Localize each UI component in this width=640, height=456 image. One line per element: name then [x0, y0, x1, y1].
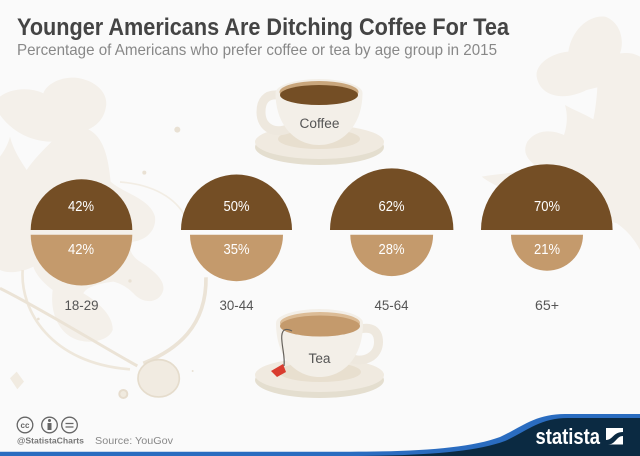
- title: Younger Americans Are Ditching Coffee For Tea: [17, 14, 510, 41]
- tea value: 28%: [378, 242, 405, 258]
- social handle: @StatistaCharts: [17, 436, 85, 446]
- coffee value: 70%: [534, 199, 560, 215]
- age label: 30-44: [220, 297, 254, 313]
- tea half circle 21%: [511, 235, 583, 271]
- tea surface: [280, 316, 360, 336]
- age label: 45-64: [374, 297, 409, 313]
- age group 65+: [481, 164, 613, 313]
- tea value: 35%: [224, 242, 250, 258]
- subtitle: Percentage of Americans who prefer coffee or tea by age group in 2015: [17, 42, 497, 59]
- statista wordmark: statista: [536, 424, 601, 449]
- age group 45-64: [330, 168, 453, 313]
- label: coffee: Coffee: [300, 116, 340, 131]
- age label: 65+: [535, 297, 559, 313]
- cup handle: [261, 95, 290, 131]
- coffee half circle 50%: [181, 174, 292, 230]
- coffee cup illustration: [255, 79, 384, 165]
- statista logo mark: [606, 428, 623, 444]
- source: Source: YouGov: [95, 435, 174, 447]
- tea cup illustration: [255, 309, 384, 398]
- coffee stains: left: [0, 78, 194, 399]
- tea cup body: [276, 323, 363, 377]
- coffee stains: right: [482, 17, 640, 250]
- coffee value: 50%: [224, 199, 250, 215]
- cup body: [276, 93, 362, 145]
- tea half circle 42%: [31, 235, 132, 285]
- age group 30-44: [181, 174, 292, 313]
- tea value: 42%: [68, 242, 94, 258]
- coffee half circle 70%: [481, 164, 613, 230]
- tea cup handle: [350, 328, 378, 360]
- tea bag tag: [271, 364, 286, 377]
- coffee half circle 42%: [31, 179, 132, 230]
- label: tea: Tea: [308, 351, 331, 366]
- saucer: [255, 125, 384, 165]
- tea saucer: [255, 358, 384, 398]
- coffee ring stain: [0, 182, 206, 397]
- tea value: 21%: [534, 242, 560, 258]
- coffee half circle 62%: [330, 168, 453, 230]
- tea half circle 28%: [350, 235, 433, 276]
- coffee surface: [280, 85, 358, 105]
- coffee value: 42%: [68, 199, 94, 215]
- age group 18-29: [31, 179, 132, 313]
- tea bag string: [282, 329, 292, 366]
- footer brand band: [0, 414, 640, 456]
- license icons: [17, 417, 77, 433]
- coffee value: 62%: [378, 199, 405, 215]
- license icons: cc: [21, 421, 30, 430]
- age label: 18-29: [64, 297, 99, 313]
- tea half circle 35%: [190, 235, 283, 281]
